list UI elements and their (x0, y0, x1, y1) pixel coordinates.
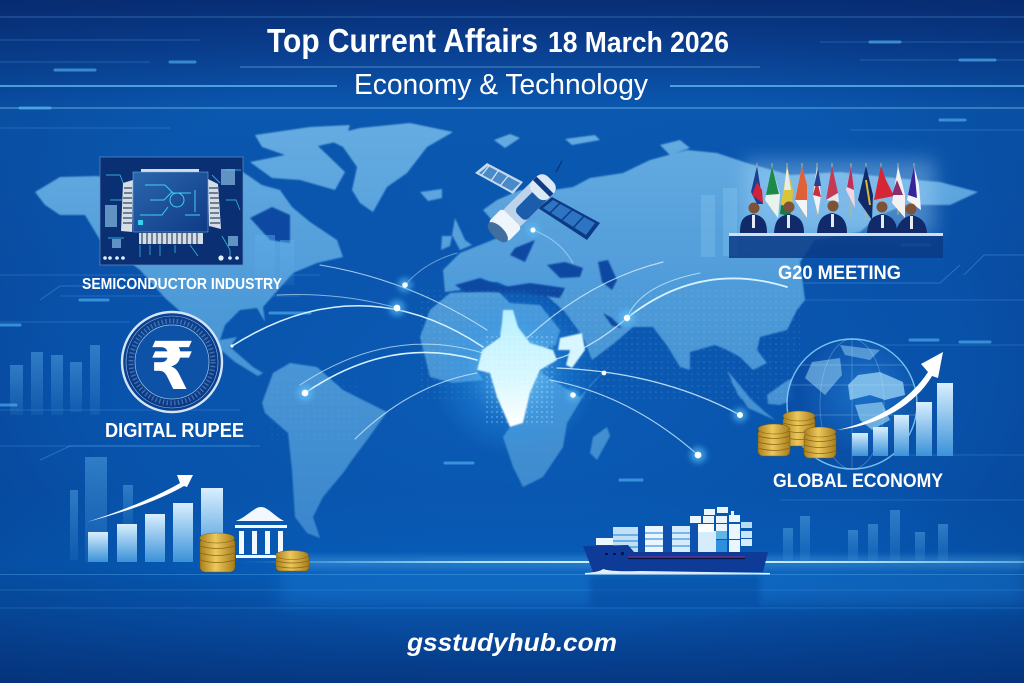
map: australia shape (767, 378, 793, 405)
chip lights (103, 255, 239, 261)
panel: g20 meeting (701, 160, 943, 284)
map: africa north (420, 290, 560, 383)
bars (88, 488, 223, 562)
growth arrow (837, 352, 943, 430)
body (498, 171, 559, 232)
solar panel right (538, 197, 600, 240)
map: britain (441, 218, 472, 250)
faint towers (701, 188, 737, 257)
panel: semiconductor industry (82, 157, 294, 293)
flags (751, 163, 921, 220)
panel: finance chart (70, 457, 309, 572)
coin stacks (200, 533, 309, 572)
subheading: Economy & Technology (354, 69, 648, 101)
map: indonesia (727, 370, 775, 420)
bank icon (235, 507, 287, 558)
heading: 18 March 2026 (548, 27, 729, 59)
rising bar chart (852, 383, 953, 456)
horizon and water (0, 556, 1024, 605)
faint bars beside chip (255, 235, 294, 285)
map: africa south (503, 363, 612, 487)
label: DIGITAL RUPEE (105, 420, 244, 442)
panel: global economy (758, 339, 953, 492)
satellite (475, 161, 600, 246)
map: eurasia (443, 150, 978, 370)
growth arrow (87, 475, 193, 522)
map: greenland (323, 123, 453, 212)
hull (583, 545, 768, 572)
cargo ship (583, 507, 770, 574)
dark inland seas (250, 207, 622, 328)
chip card (100, 157, 243, 265)
faint bar chart (10, 345, 100, 415)
map: canadian arctic islands (250, 125, 350, 190)
faint bar chart right (783, 510, 948, 562)
chip die (133, 172, 208, 232)
coin stacks (758, 411, 836, 458)
title block (267, 22, 729, 101)
solar panel left (475, 163, 523, 194)
wake (585, 569, 770, 574)
map: south america (262, 363, 387, 538)
world map (35, 123, 978, 538)
label: SEMICONDUCTOR INDUSTRY (82, 276, 282, 293)
map: northern islands (494, 134, 690, 155)
website footer: gsstudyhub.com (406, 629, 617, 657)
faint towers (70, 457, 133, 562)
water reflection (590, 576, 760, 606)
connection arcs (232, 230, 787, 455)
map dotted texture (270, 290, 800, 440)
network nodes (230, 224, 747, 463)
map: iceland (420, 189, 442, 201)
label: GLOBAL ECONOMY (773, 471, 943, 492)
containers (596, 507, 752, 554)
conference table (729, 233, 943, 258)
rupee symbol: ₹ (149, 328, 195, 405)
heading: Top Current Affairs (267, 22, 538, 59)
heading (267, 22, 729, 59)
label: G20 MEETING (778, 263, 901, 284)
delegates (740, 200, 927, 233)
highlighted india shape with glow (430, 287, 600, 457)
nozzle (484, 208, 522, 246)
chip pins (121, 169, 221, 244)
rupee coin (122, 312, 222, 412)
panel: digital rupee (10, 312, 244, 442)
map: madagascar (590, 427, 610, 460)
map: north america (35, 170, 343, 376)
globe (787, 339, 917, 469)
